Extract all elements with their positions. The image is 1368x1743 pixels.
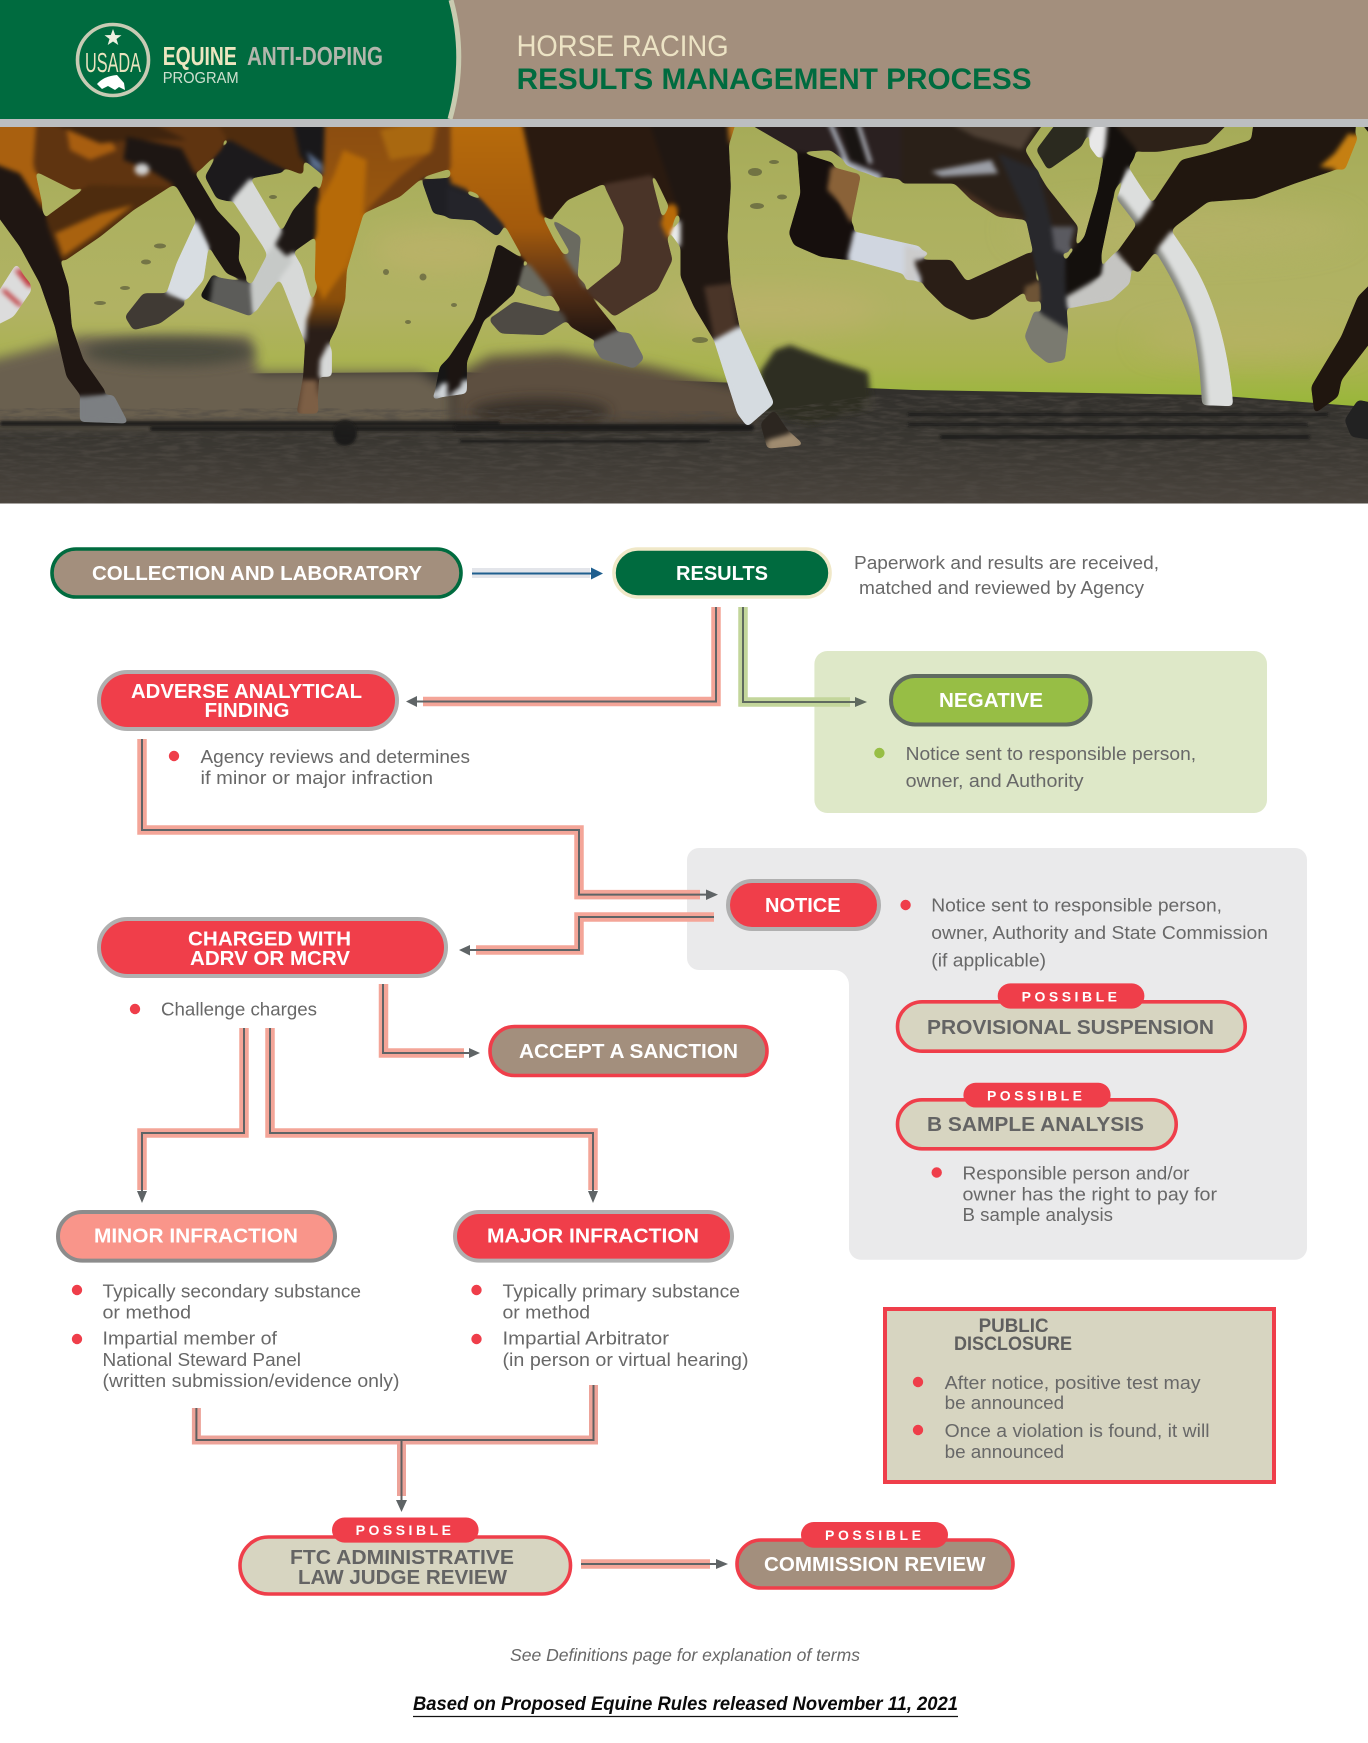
panel: negative	[814, 651, 1267, 813]
pill: collection and laboratory	[52, 549, 461, 597]
pill: adverse analytical finding: FINDING	[204, 700, 290, 722]
tile 2 horses	[447, 117, 921, 448]
pill: adverse analytical finding	[99, 672, 397, 729]
pill: notice: NOTICE	[765, 895, 841, 917]
logo: USADA roundel	[78, 24, 148, 96]
pill: possible B sample analysis: B SAMPLE ANALYSIS	[927, 1114, 1144, 1136]
text: notice note: owner, Authority and State Commission	[931, 922, 1268, 943]
text: adverse finding note	[169, 746, 470, 788]
pill: charged with ADRV or MCRV: ADRV OR MCRV	[190, 948, 351, 970]
tile 3 horses	[901, 117, 1368, 440]
text: B sample note: Responsible person and/or	[962, 1162, 1190, 1184]
horses	[0, 117, 1368, 448]
text: major infraction notes: (in person or virtual hearing)	[502, 1349, 748, 1370]
pill: possible commission review: POSSIBLE	[825, 1527, 921, 1543]
text: minor infraction notes: Typically secondary substance	[102, 1280, 361, 1302]
track shadow streaks	[0, 413, 1328, 446]
pill: major infraction	[455, 1212, 732, 1261]
callout: public disclosure: After notice, positive test may	[945, 1372, 1201, 1393]
callout: public disclosure: DISCLOSURE	[954, 1334, 1072, 1355]
callout: public disclosure	[885, 1309, 1274, 1482]
arrow: adverse finding to notice	[142, 739, 718, 900]
text: notice note	[900, 894, 1268, 970]
text: results description: Paperwork and results are received,	[854, 552, 1159, 573]
title: HORSE RACING	[517, 30, 729, 63]
callout: public disclosure: Once a violation is found, it will	[945, 1420, 1210, 1441]
text: major infraction notes: Typically primary substance	[502, 1280, 740, 1302]
text: notice note: Notice sent to responsible person,	[931, 894, 1222, 916]
arrow: challenge to major infraction	[270, 1028, 598, 1203]
pill: minor infraction	[58, 1212, 335, 1261]
pill: negative: NEGATIVE	[939, 690, 1043, 712]
pill: accept a sanction: ACCEPT A SANCTION	[519, 1041, 738, 1063]
pill: charged with ADRV or MCRV	[99, 919, 446, 976]
text: negative note: owner, and Authority	[906, 770, 1084, 791]
text: major infraction notes: or method	[502, 1302, 590, 1322]
panel: notice	[687, 848, 1307, 1260]
photo: galloping horse legs on a dirt track	[0, 117, 1368, 505]
arrow: collection to results	[472, 568, 603, 580]
logo: USADA roundel: USADA	[85, 47, 141, 78]
pill: possible provisional suspension	[898, 983, 1245, 1051]
text: minor infraction notes: Impartial member of	[102, 1328, 278, 1348]
text: notice note: (if applicable)	[931, 950, 1046, 970]
pill: possible provisional suspension: POSSIBLE	[1022, 988, 1117, 1004]
logo wordmark: PROGRAM	[163, 70, 239, 87]
text: results description: matched and reviewed by Agency	[859, 577, 1145, 598]
header band	[0, 0, 1368, 127]
text: major infraction notes	[471, 1280, 748, 1370]
text: negative note	[874, 743, 1196, 791]
pill: results	[614, 549, 830, 597]
pill: negative	[891, 676, 1090, 724]
pill: minor infraction: MINOR INFRACTION	[94, 1226, 298, 1248]
arrow: charged to accept a sanction	[383, 984, 480, 1058]
logo wordmark	[163, 41, 383, 87]
text: definitions note: See Definitions page for explanation of terms	[510, 1645, 860, 1665]
arrow: challenge to minor infraction	[137, 1028, 244, 1203]
arrow: results to negative	[743, 607, 867, 707]
dust clouds	[0, 336, 872, 426]
logo wordmark: ANTI-DOPING	[247, 41, 383, 71]
text: major infraction notes: Impartial Arbitrator	[502, 1328, 669, 1348]
pill: possible B sample analysis	[898, 1083, 1176, 1149]
title	[517, 30, 1032, 96]
pill: collection and laboratory: COLLECTION AND LABORATORY	[92, 563, 423, 585]
text: results description	[854, 552, 1159, 598]
title: RESULTS MANAGEMENT PROCESS	[517, 63, 1032, 96]
pill: accept a sanction	[490, 1026, 767, 1076]
pill: adverse analytical finding: ADVERSE ANALYTICAL	[131, 681, 362, 703]
arrow: infractions merge to FTC review	[196, 1385, 594, 1512]
text: source note: Based on Proposed Equine Rules released November 11, 2021	[413, 1693, 958, 1715]
text: adverse finding note: if minor or major infraction	[200, 767, 433, 788]
text: challenge charges: Challenge charges	[161, 998, 317, 1020]
callout: public disclosure: be announced	[945, 1392, 1064, 1413]
pill: possible FTC administrative law judge review: LAW JUDGE REVIEW	[298, 1567, 507, 1589]
tile 1 horses	[0, 117, 467, 423]
pill: notice	[728, 881, 879, 929]
text: adverse finding note: Agency reviews and determines	[200, 746, 470, 767]
pill: possible FTC administrative law judge review: POSSIBLE	[356, 1522, 451, 1538]
arrow: results to adverse finding	[406, 607, 716, 707]
text: minor infraction notes: National Steward Panel	[102, 1349, 301, 1370]
text: negative note: Notice sent to responsible person,	[906, 743, 1196, 764]
pill: major infraction: MAJOR INFRACTION	[487, 1226, 699, 1248]
pill: results: RESULTS	[676, 563, 768, 585]
pill: charged with ADRV or MCRV: CHARGED WITH	[188, 928, 351, 950]
pill: possible commission review	[737, 1522, 1013, 1588]
pill: possible commission review: COMMISSION REVIEW	[764, 1554, 986, 1576]
flying dirt specks	[94, 160, 787, 343]
arrow: FTC review to commission review	[581, 1559, 728, 1569]
text: minor infraction notes: or method	[102, 1302, 191, 1322]
text: B sample note	[932, 1162, 1217, 1225]
pill: possible B sample analysis: POSSIBLE	[987, 1087, 1082, 1103]
pill: possible FTC administrative law judge review	[240, 1518, 570, 1594]
pill: possible provisional suspension: PROVISIONAL SUSPENSION	[927, 1017, 1214, 1039]
text: minor infraction notes	[72, 1280, 400, 1391]
text: minor infraction notes: (written submission/evidence only)	[102, 1370, 400, 1391]
callout: public disclosure: be announced	[945, 1441, 1064, 1462]
arrow: notice to charged	[459, 917, 714, 956]
callout: public disclosure: PUBLIC	[979, 1316, 1049, 1337]
pill: possible FTC administrative law judge review: FTC ADMINISTRATIVE	[290, 1547, 514, 1569]
text: B sample note: owner has the right to pay for	[962, 1183, 1217, 1204]
logo wordmark: EQUINE	[163, 41, 237, 71]
text: B sample note: B sample analysis	[962, 1204, 1113, 1225]
